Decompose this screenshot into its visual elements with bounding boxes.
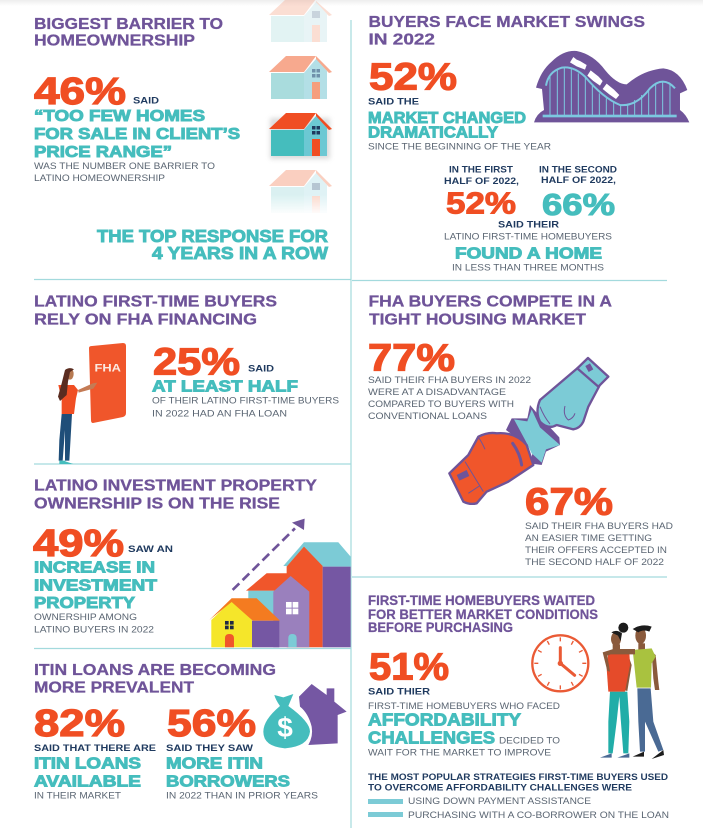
stat: 25 percent: SAID bbox=[248, 364, 274, 374]
highlight: at least half: AT LEAST HALF bbox=[152, 378, 298, 395]
icon: rising houses with arrow bbox=[209, 519, 351, 647]
stat: 52 percent: 52% bbox=[369, 56, 457, 98]
stat: 56 percent: IN 2022 THAN IN PRIOR YEARS bbox=[166, 791, 318, 801]
stat: 56 percent: MORE ITIN bbox=[166, 756, 263, 773]
text: found a home: LATINO FIRST-TIME HOMEBUYERS bbox=[444, 232, 612, 242]
text: number one barrier bbox=[34, 161, 215, 183]
stat: 67 percent: THE SECOND HALF OF 2022 bbox=[525, 557, 664, 567]
text: found a home bbox=[444, 220, 612, 273]
heading: market swings bbox=[368, 14, 645, 49]
heading: waited for better conditions: FOR BETTER MARKET CONDITIONS bbox=[368, 607, 598, 622]
heading: FHA competition: TIGHT HOUSING MARKET bbox=[369, 312, 587, 329]
heading: waited for better conditions: BEFORE PURCHASING bbox=[368, 620, 513, 635]
text: ownership among buyers: OWNERSHIP AMONG bbox=[34, 612, 137, 622]
stat: 51 percent: 51% bbox=[369, 646, 449, 688]
stat: 77 percent: COMPARED TO BUYERS WITH bbox=[368, 399, 514, 409]
stat: 82 percent: ITIN LOANS bbox=[34, 756, 141, 773]
text: FHA loan: IN 2022 HAD AN FHA LOAN bbox=[152, 409, 287, 419]
stat: 67 percent bbox=[525, 482, 673, 567]
icon: faded house 1 bbox=[269, 0, 332, 42]
stat: 46 percent: SAID bbox=[133, 96, 159, 106]
stat: 77 percent: SAID THEIR FHA BUYERS IN 2022 bbox=[368, 375, 531, 385]
stat: 46 percent bbox=[34, 71, 159, 113]
stat: first half: HALF OF 2022, bbox=[444, 176, 519, 186]
heading: investment property: LATINO INVESTMENT PROPERTY bbox=[34, 478, 318, 495]
panel: biggest barrier bbox=[34, 0, 332, 263]
highlight: increase in investment property: PROPERTY bbox=[34, 595, 136, 612]
stat: 25 percent: 25% bbox=[153, 341, 240, 383]
panel: ITIN loans bbox=[34, 662, 347, 801]
stat: 46 percent: 46% bbox=[34, 71, 126, 113]
stat: first half: IN THE FIRST bbox=[449, 165, 513, 175]
stat: second half bbox=[539, 165, 617, 222]
text: found a home: IN LESS THAN THREE MONTHS bbox=[452, 263, 604, 273]
stat: 67 percent: AN EASIER TIME GETTING bbox=[525, 533, 652, 543]
text: found a home: FOUND A HOME bbox=[455, 246, 602, 263]
highlight: market changed dramatically bbox=[368, 110, 526, 142]
stat: first half: 52% bbox=[446, 186, 516, 221]
text: popular strategies bbox=[368, 772, 668, 793]
stat: second half: 66% bbox=[542, 187, 615, 222]
icon: money bag and house bbox=[263, 684, 347, 748]
text: found a home: SAID THEIR bbox=[498, 220, 559, 230]
list item: down payment assistance: USING DOWN PAYMENT ASSISTANCE bbox=[408, 796, 591, 806]
heading: FHA financing bbox=[34, 294, 277, 329]
stat: second half: IN THE SECOND bbox=[539, 165, 617, 175]
highlight: too few homes bbox=[34, 108, 240, 161]
icon: FHA card: FHA bbox=[94, 362, 121, 374]
heading: market swings: IN 2022 bbox=[368, 32, 435, 49]
highlight: market changed dramatically: DRAMATICALLY bbox=[368, 124, 499, 142]
stat: second half: HALF OF 2022, bbox=[541, 175, 616, 185]
heading: biggest barrier: HOMEOWNERSHIP bbox=[34, 32, 195, 50]
list item: co-borrower: PURCHASING WITH A CO-BORROWER ON THE LOAN bbox=[408, 810, 669, 820]
callout: top response: THE TOP RESPONSE FOR bbox=[97, 226, 328, 246]
icon: woman bbox=[58, 368, 97, 464]
heading: biggest barrier bbox=[34, 16, 223, 50]
text: popular strategies: THE MOST POPULAR STRATEGIES FIRST-TIME BUYERS USED bbox=[368, 772, 668, 782]
stat: 56 percent: SAID THEY SAW bbox=[166, 743, 253, 753]
highlight: increase in investment property bbox=[34, 560, 158, 612]
stat: first half bbox=[444, 165, 519, 221]
panel: investment property bbox=[33, 478, 351, 647]
text: ownership among buyers: LATINO BUYERS IN 2022 bbox=[34, 625, 154, 635]
callout: top response bbox=[97, 226, 329, 263]
text: ownership among buyers bbox=[34, 612, 154, 635]
highlight: market changed dramatically: MARKET CHANGED bbox=[368, 110, 526, 127]
text: affordability challenges: FIRST-TIME HOMEBUYERS WHO FACED bbox=[368, 701, 560, 711]
text: FHA loan: OF THEIR LATINO FIRST-TIME BUYERS bbox=[152, 396, 339, 406]
heading: FHA financing: LATINO FIRST-TIME BUYERS bbox=[34, 294, 277, 311]
highlight: too few homes: FOR SALE IN CLIENT’S bbox=[34, 126, 240, 143]
stat: 56 percent bbox=[166, 703, 318, 801]
stat: 82 percent: SAID THAT THERE ARE bbox=[34, 743, 156, 753]
text: number one barrier: WAS THE NUMBER ONE BARRIER TO bbox=[34, 161, 215, 171]
stat: 82 percent bbox=[34, 703, 156, 801]
text: since beginning of year: SINCE THE BEGINNING OF THE YEAR bbox=[368, 142, 551, 152]
heading: waited for better conditions: FIRST-TIME HOMEBUYERS WAITED bbox=[368, 593, 595, 608]
icon: boxing gloves bbox=[449, 358, 608, 504]
stat: 67 percent: 67% bbox=[525, 482, 613, 524]
text: number one barrier: LATINO HOMEOWNERSHIP bbox=[34, 173, 165, 183]
panel: waited for better conditions bbox=[368, 593, 669, 820]
stat: 67 percent: THEIR OFFERS ACCEPTED IN bbox=[525, 545, 667, 555]
highlight: increase in investment property: INVESTMENT bbox=[34, 578, 158, 595]
stat: 52 percent: SAID THE bbox=[368, 97, 419, 107]
icon: FHA card bbox=[89, 343, 126, 423]
icon: faded house 4 bbox=[269, 170, 332, 213]
heading: market swings: BUYERS FACE MARKET SWINGS bbox=[368, 14, 645, 31]
stat: 25 percent bbox=[153, 341, 274, 383]
stat: 51 percent: SAID THIER bbox=[368, 687, 430, 697]
text: affordability challenges: WAIT FOR THE MARKET TO IMPROVE bbox=[368, 748, 551, 758]
stat: 77 percent: WERE AT A DISADVANTAGE bbox=[368, 387, 506, 397]
heading: FHA financing: RELY ON FHA FINANCING bbox=[34, 312, 257, 329]
heading: FHA competition: FHA BUYERS COMPETE IN A bbox=[368, 294, 612, 311]
stat: 49 percent: SAW AN bbox=[128, 544, 173, 554]
stat: 67 percent: SAID THEIR FHA BUYERS HAD bbox=[525, 521, 673, 531]
text: FHA loan bbox=[152, 396, 339, 419]
stat: 82 percent: IN THEIR MARKET bbox=[34, 791, 121, 801]
heading: ITIN loans: MORE PREVALENT bbox=[34, 680, 195, 697]
stat: 56 percent: BORROWERS bbox=[166, 774, 290, 791]
stat: 77 percent: CONVENTIONAL LOANS bbox=[368, 411, 487, 421]
highlight: too few homes: PRICE RANGE” bbox=[34, 144, 172, 161]
highlight: too few homes: “TOO FEW HOMES bbox=[34, 108, 205, 125]
text: affordability challenges: AFFORDABILITY bbox=[368, 709, 521, 729]
heading: investment property: OWNERSHIP IS ON THE RISE bbox=[34, 496, 280, 513]
panel: market swings bbox=[368, 14, 689, 273]
text: affordability challenges: DECIDED TO bbox=[499, 736, 560, 746]
stat: 49 percent: 49% bbox=[33, 523, 124, 565]
text: popular strategies: TO OVERCOME AFFORDABILITY CHALLENGES WERE bbox=[368, 783, 632, 793]
icon: clock bbox=[532, 635, 588, 691]
stat: 82 percent: AVAILABLE bbox=[34, 774, 141, 791]
stat: 49 percent bbox=[33, 523, 173, 565]
panel: FHA competition bbox=[368, 294, 673, 567]
text: affordability challenges: CHALLENGES bbox=[368, 727, 495, 747]
callout: top response: 4 YEARS IN A ROW bbox=[152, 243, 329, 263]
heading: waited for better conditions bbox=[368, 593, 598, 635]
heading: investment property bbox=[34, 478, 318, 513]
stat: 77 percent bbox=[368, 338, 531, 421]
stat: 56 percent: 56% bbox=[167, 703, 256, 745]
heading: biggest barrier: BIGGEST BARRIER TO bbox=[34, 16, 223, 33]
icon: roller coaster bbox=[534, 51, 689, 122]
text: affordability challenges bbox=[368, 701, 560, 758]
icon: highlighted house bbox=[269, 113, 332, 159]
highlight: increase in investment property: INCREASE IN bbox=[34, 560, 155, 577]
icon: couple bbox=[600, 623, 664, 759]
icon: house 2 bbox=[269, 56, 332, 99]
heading: ITIN loans bbox=[34, 662, 276, 697]
stat: 77 percent: 77% bbox=[368, 338, 455, 380]
heading: FHA competition bbox=[368, 294, 612, 329]
icon: money bag and house: $ bbox=[277, 712, 293, 743]
heading: ITIN loans: ITIN LOANS ARE BECOMING bbox=[34, 662, 276, 679]
stat: 82 percent: 82% bbox=[34, 703, 125, 745]
panel: FHA financing bbox=[34, 294, 339, 464]
